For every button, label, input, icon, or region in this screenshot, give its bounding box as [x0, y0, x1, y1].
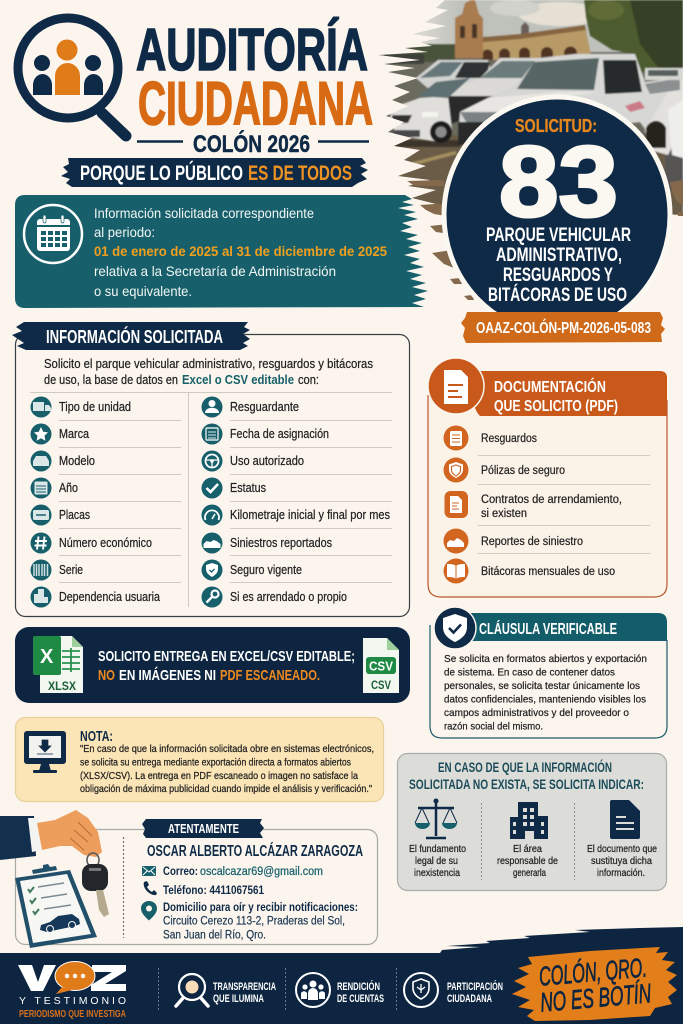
panel heading: EN CASO DE QUE LA INFORMACIÓN [438, 758, 612, 775]
subtitle: Colón 2026: COLÓN 2026 [193, 130, 310, 158]
slogan banner [61, 158, 368, 187]
doc: resguardos [444, 426, 537, 450]
field: uso autorizado [202, 450, 304, 472]
callout: Colón no es botín [512, 947, 677, 1021]
banner text: SOLICITO ENTREGA EN EXCEL/CSV EDITABLE; [98, 648, 355, 665]
banner text [98, 648, 355, 684]
clause header: CLÁUSULA VERIFICABLE [479, 621, 617, 638]
field: marca: Marca [59, 427, 89, 441]
field: fecha de asignación [202, 424, 329, 444]
left rear truck [416, 60, 494, 90]
field: seguro vigente [202, 560, 302, 580]
clause text: de sistema. En caso de contener datos [444, 666, 615, 678]
heading: atentamente: ATENTAMENTE [168, 822, 239, 836]
doc: contratos [444, 491, 622, 520]
field: kilometraje: Kilometraje inicial y final por mes [230, 508, 390, 522]
doc: contratos: Contratos de arrendamiento, [481, 494, 622, 506]
illustration: hand holding car keys [0, 810, 109, 917]
note text: (XLSX/CSV). La entrega en PDF escaneado o imagen no satisface la [80, 771, 359, 782]
item: área responsable: generarla [513, 868, 546, 879]
panel: si la información no existe [398, 754, 666, 890]
item: área responsable [497, 802, 558, 879]
pillar: transparencia: TRANSPARENCIA [213, 981, 276, 993]
mid truck [480, 56, 540, 97]
icon: XLSX file: X [40, 646, 54, 668]
pillar: rendición de cuentas [296, 973, 384, 1007]
pillar: transparencia: QUE ILUMINA [213, 993, 264, 1005]
contact: address: Circuito Cerezo 113-2, Praderas del Sol, [163, 916, 345, 928]
pillar: transparencia [176, 974, 276, 1006]
trees [583, 0, 658, 72]
ground [398, 134, 683, 215]
field: número económico [30, 532, 152, 554]
wall [483, 25, 592, 60]
panel: cláusula verificable [430, 607, 667, 738]
doc: pólizas [444, 458, 565, 482]
field: resguardante [202, 396, 299, 418]
field: arrendado o propio [202, 586, 347, 608]
note text: "En caso de que la información solicitada obre en sistemas electrónicos, [80, 744, 374, 755]
intro text [44, 357, 373, 387]
slogan banner: PORQUE LO PÚBLICO [80, 161, 243, 185]
photo: municipal vehicle fleet in front of building [370, 0, 683, 300]
panel: información solicitada [12, 322, 410, 616]
pillar: participación ciudadana [404, 973, 503, 1007]
clause header [460, 613, 667, 641]
illustration: clipboard with car [15, 864, 97, 948]
period text: 01 de enero de 2025 al 31 de diciembre de 2025 [94, 243, 387, 259]
item: fundamento legal: inexistencia [414, 868, 460, 879]
banner: entrega en Excel/CSV [15, 627, 410, 703]
item: área responsable: El área [513, 844, 542, 855]
doc: bitácoras [444, 558, 615, 584]
panel heading [409, 758, 644, 792]
banner text: NO [98, 667, 115, 684]
seal description: ADMINISTRATIVO, [496, 245, 622, 266]
icon: calendar [24, 205, 82, 263]
icon: CSV file: CSV [369, 660, 394, 674]
note text [80, 744, 374, 795]
field: resguardante: Resguardante [230, 400, 299, 414]
logo: magnifier with citizens [18, 18, 126, 136]
icon: CSV file: CSV [371, 680, 391, 692]
title [136, 17, 373, 138]
contact: phone: Teléfono: 4411067561 [163, 885, 265, 897]
field: modelo [30, 450, 95, 472]
contact: address: San Juan del Río, Qro. [163, 930, 266, 942]
field: siniestros: Siniestros reportados [230, 536, 332, 550]
title: AUDITORÍA [136, 17, 368, 83]
field: número económico: Número económico [59, 536, 152, 550]
heading: atentamente [142, 819, 264, 838]
intro text: con: [298, 373, 319, 387]
seal description [486, 225, 631, 306]
doc: bitácoras: Bitácoras mensuales de uso [481, 566, 615, 578]
item: documento sustituto [587, 800, 657, 879]
item: fundamento legal: legal de su [415, 856, 458, 867]
field: año [30, 478, 78, 498]
doc: contratos: si existen [481, 508, 527, 520]
clause text: Se solicita en formatos abiertos y exportación [444, 653, 647, 665]
big number: 83 [499, 126, 618, 238]
doc: reportes: Reportes de siniestro [481, 536, 583, 548]
intro text: Solicito el parque vehicular administrativo, resguardos y bitácoras [44, 357, 373, 371]
icon: XLSX file: XLSX [48, 679, 76, 693]
logo: Voz y Testimonio: PERIODISMO QUE INVESTIGA [19, 1009, 126, 1020]
clause text [444, 653, 647, 732]
clause text: razón social del mismo. [444, 720, 543, 732]
item: documento sustituto: El documento que [587, 844, 657, 855]
icon: document [428, 358, 484, 414]
pillar: rendición de cuentas: DE CUENTAS [337, 993, 384, 1005]
doc: resguardos: Resguardos [481, 433, 537, 445]
item: documento sustituto: información. [597, 868, 645, 879]
note text: se solicita su entrega mediante exportación directa a formatos abiertos [80, 758, 351, 768]
period text: o su equivalente. [94, 283, 192, 299]
ground streaks [407, 180, 683, 300]
doc: pólizas: Pólizas de seguro [481, 465, 565, 477]
doc: reportes [444, 528, 583, 554]
clause text: personales, se solicita testar únicamente los [444, 680, 640, 692]
field: placas: Placas [59, 508, 90, 522]
pillar: participación ciudadana: PARTICIPACIÓN [447, 980, 503, 993]
field: arrendado o propio: Si es arrendado o propio [230, 590, 347, 604]
clause text: campos administrativos y del proveedor o [444, 707, 629, 719]
field: estatus: Estatus [230, 481, 266, 495]
field: año: Año [59, 481, 78, 495]
field: siniestros [202, 532, 332, 554]
signer name: OSCAR ALBERTO ALCÁZAR ZARAGOZA [147, 843, 363, 860]
contact: address [141, 901, 358, 942]
panel: documentación que solicito [428, 358, 667, 597]
field: placas [30, 504, 90, 526]
banner text: PDF ESCANEADO. [220, 667, 320, 684]
panel: contacto [16, 819, 378, 944]
field: tipo de unidad: Tipo de unidad [59, 400, 131, 414]
panel header: DOCUMENTACIÓN [494, 377, 606, 396]
field: tipo de unidad [30, 396, 131, 418]
panel heading [12, 322, 250, 350]
pillar: rendición de cuentas: RENDICIÓN [337, 980, 380, 993]
seal description: RESGUARDOS Y [503, 265, 613, 286]
field: seguro vigente: Seguro vigente [230, 563, 302, 577]
front truck [458, 52, 668, 130]
field: modelo: Modelo [59, 454, 95, 468]
left car [390, 96, 452, 142]
period text: relativa a la Secretaría de Administración [94, 263, 336, 279]
request seal: solicitud 83 [444, 97, 670, 333]
contact: phone [144, 881, 265, 897]
item: fundamento legal [409, 798, 466, 879]
item: área responsable: responsable de [497, 856, 558, 867]
item: documento sustituto: sustituya dicha [591, 856, 652, 867]
field: serie [30, 560, 83, 580]
contact: email: oscalcazar69@gmail.com [200, 866, 323, 878]
note heading: NOTA: [80, 728, 113, 745]
intro text: de uso, la base de datos en [44, 373, 178, 387]
item: fundamento legal: El fundamento [409, 844, 466, 855]
seal label: SOLICITUD: [515, 116, 597, 136]
panel header: QUE SOLICITO (PDF) [494, 398, 618, 415]
period text: al periodo: [94, 224, 155, 240]
contact: address: Domicilio para oír y recibir notificaciones: [163, 902, 358, 914]
icon: monitor download [24, 731, 66, 773]
clause text: datos confidenciales, manteniendo visibles los [444, 694, 646, 706]
field: kilometraje [202, 504, 390, 526]
footer [0, 927, 683, 1024]
icon: CSV file [363, 638, 399, 693]
field: estatus [202, 478, 266, 498]
field: uso autorizado: Uso autorizado [230, 454, 304, 468]
note text: obligación de máxima publicidad cuando impide el análisis y verificación." [80, 784, 372, 795]
intro text: Excel o CSV editable [182, 373, 294, 387]
tower [455, 0, 483, 58]
logo: Voz y Testimonio [18, 962, 126, 1020]
pillar: participación ciudadana: CIUDADANA [447, 993, 492, 1005]
panel heading: INFORMACIÓN SOLICITADA [46, 326, 223, 347]
field: serie: Serie [59, 563, 83, 577]
seal description: BITÁCORAS DE USO [488, 284, 627, 306]
banner text: EN IMÁGENES NI [119, 667, 216, 684]
period text: Información solicitada correspondiente [94, 205, 314, 221]
icon: verified shield [434, 607, 476, 649]
field: dependencia usuaria [30, 586, 160, 608]
logo: Voz y Testimonio: Y TESTIMONIO [19, 995, 126, 1007]
panel header [470, 371, 667, 416]
panel: requested period [15, 195, 428, 308]
field: marca [30, 424, 89, 444]
slogan banner: ES DE TODOS [248, 162, 352, 185]
folio tag [461, 312, 665, 343]
contact: email [142, 866, 323, 878]
contact: email: Correo: [163, 866, 198, 878]
panel: nota [16, 718, 384, 802]
field: fecha de asignación: Fecha de asignación [230, 427, 329, 441]
field: dependencia usuaria: Dependencia usuaria [59, 590, 160, 604]
period text [94, 205, 387, 299]
icon: XLSX file [33, 636, 83, 693]
seal description: PARQUE VEHICULAR [486, 225, 631, 246]
title: CIUDADANA [138, 70, 373, 138]
